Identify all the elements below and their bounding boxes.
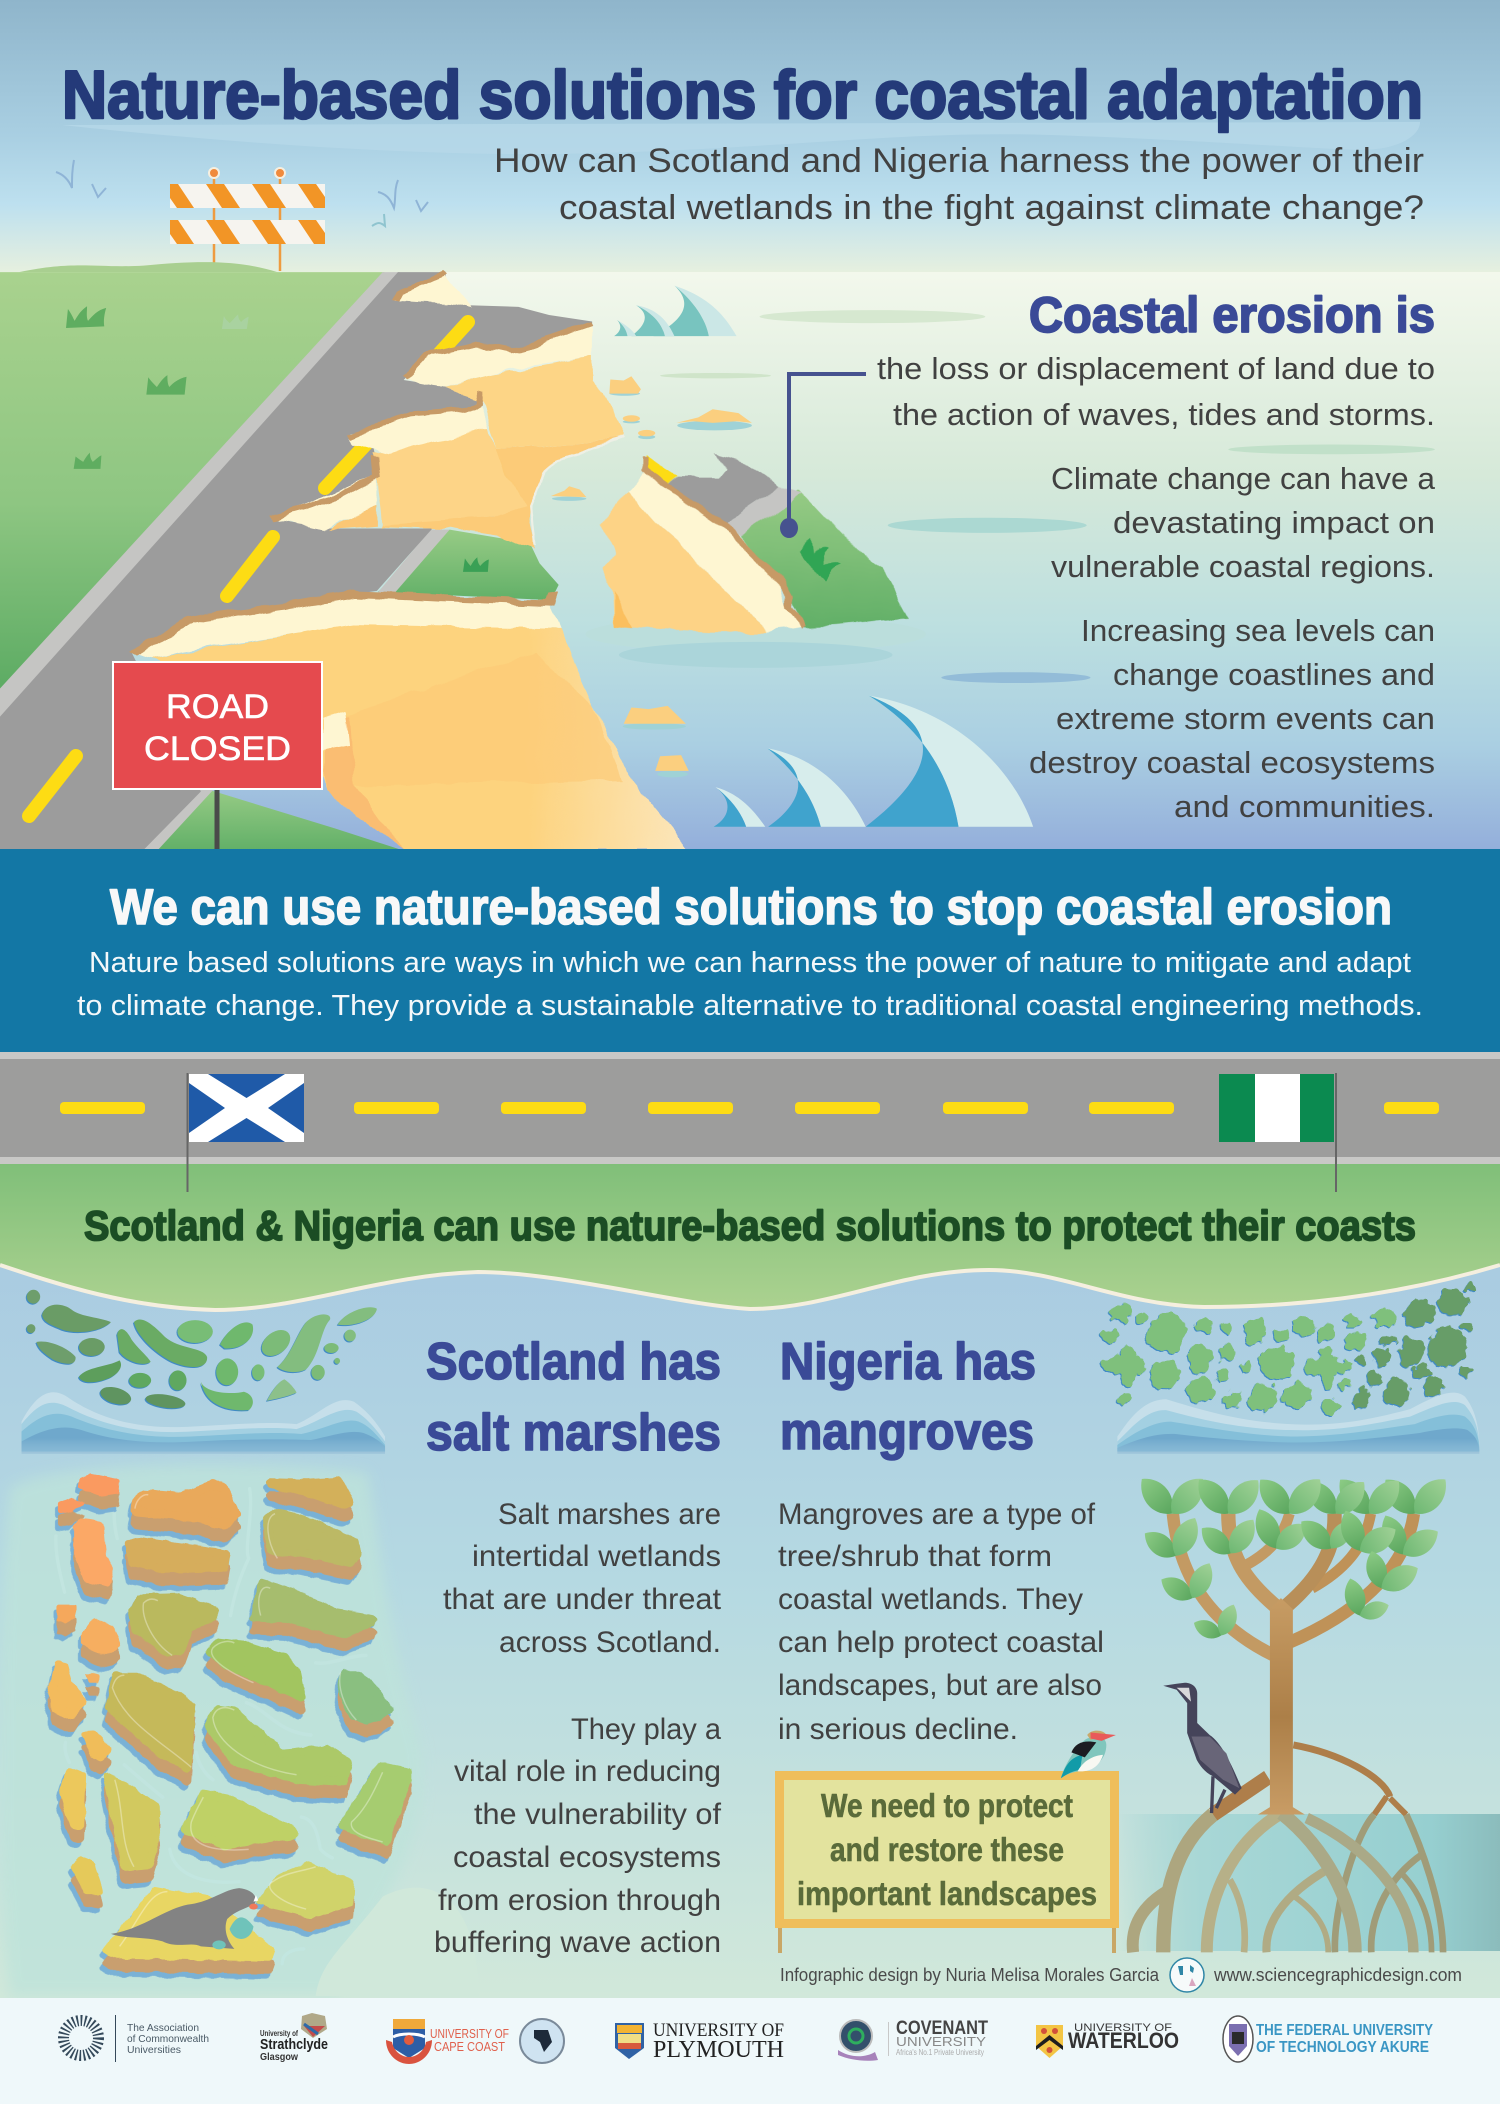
cliff: left strata [271, 474, 377, 529]
logo: University of Waterloo [1036, 2022, 1179, 2058]
heading: Scotland has salt marshes: salt marshes [426, 1404, 721, 1462]
cliff: upper strata [404, 325, 592, 386]
green bank [0, 1164, 1500, 1310]
text: salt marshes: Salt marshes are [498, 1498, 721, 1531]
logo: Covenant University: COVENANT [896, 2018, 988, 2039]
panel: road divider [0, 1052, 1500, 1164]
logo: University of Waterloo: UNIVERSITY OF [1074, 2022, 1172, 2034]
salt marsh illustration [0, 1290, 478, 1996]
icon: island grass [798, 540, 841, 582]
land: grass verge [0, 272, 385, 691]
logo: University of Cape Coast: UNIVERSITY OF [430, 2027, 509, 2041]
callout sign: We need to protect [821, 1787, 1073, 1824]
arrow: leader line [780, 374, 866, 538]
text: climate impact: Climate change can have a [1051, 461, 1436, 496]
icon: small waves [614, 286, 737, 336]
logo: University of Cape Coast [386, 2019, 564, 2064]
road closed sign [113, 662, 322, 850]
heading: Nigeria has mangroves [780, 1333, 1036, 1461]
logo: University of Strathclyde: Glasgow [260, 2052, 298, 2063]
text: mangroves: Mangroves are a type of [778, 1498, 1096, 1531]
cliff: lower section [153, 623, 689, 850]
icon: kingfisher [1061, 1731, 1116, 1778]
panel: nature-based solutions banner [0, 849, 1500, 1052]
cliffs [132, 273, 910, 850]
text: salt marshes: across Scotland. [499, 1626, 721, 1659]
waves band [22, 1392, 385, 1454]
flag: Nigeria [1219, 1073, 1337, 1192]
mini map: mangrove patches [1100, 1284, 1476, 1416]
callout sign [775, 1771, 1119, 1953]
text: climate impact: devastating impact on [1113, 505, 1435, 540]
text: salt marshes: They play a [571, 1713, 721, 1746]
text: salt marshes [434, 1498, 722, 1959]
logo: University of Strathclyde: University of [260, 2029, 298, 2038]
cliff: middle strata [348, 403, 488, 453]
icon: sand fragments [551, 376, 752, 777]
logo: Covenant University: UNIVERSITY [896, 2034, 986, 2049]
logo: Covenant University: Africa's No.1 Private University [896, 2048, 984, 2057]
banner text: to climate change. They provide a sustainable alternative to traditional coastal engineering methods. [77, 990, 1423, 1022]
text: sea levels: destroy coastal ecosystems [1029, 745, 1435, 780]
cliff: top fragment [395, 273, 472, 308]
logo: Association of Commonwealth Universities: The Association [127, 2022, 199, 2034]
text: sea levels: and communities. [1174, 789, 1435, 824]
icon: designer logo [1170, 1958, 1204, 1992]
subtitle: coastal wetlands in the fight against climate change? [559, 189, 1424, 227]
logo: University of Plymouth: UNIVERSITY OF [653, 2020, 784, 2041]
trunk [1258, 1598, 1305, 1815]
text: mangroves: tree/shrub that form [778, 1540, 1052, 1573]
text: mangroves: can help protect coastal [778, 1626, 1104, 1659]
panel: lower wetlands [0, 1073, 1500, 1998]
logo: Federal University of Technology Akure [1223, 2016, 1434, 2062]
subtitle [494, 142, 1424, 227]
island: broken road fragment [601, 453, 910, 632]
road closed sign: CLOSED [144, 730, 291, 768]
cliff: sand body [381, 438, 624, 550]
text: mangroves: coastal wetlands. They [778, 1583, 1083, 1616]
panel: footer logos [0, 1998, 1500, 2104]
subtitle: How can Scotland and Nigeria harness the power of their [494, 142, 1424, 180]
road dashes [29, 322, 468, 816]
text: salt marshes: intertidal wetlands [472, 1540, 721, 1573]
title: Nature-based solutions for coastal adaptation [62, 57, 1423, 133]
icon: birds [56, 160, 428, 226]
logo: Association of Commonwealth Universities: of Commonwealth [127, 2033, 209, 2045]
text: salt marshes: coastal ecosystems [453, 1841, 721, 1874]
tree branches [1173, 1514, 1414, 1655]
water ripples [56, 1489, 366, 1964]
text: definition: the loss or displacement of land due to [877, 351, 1435, 386]
island highlights [112, 1495, 383, 1946]
panel: coastal erosion scene [0, 262, 1500, 850]
text: sea levels: Increasing sea levels can [1081, 613, 1435, 648]
logo: University of Cape Coast: CAPE COAST [434, 2040, 505, 2054]
logo: Federal University of Technology Akure: THE FEDERAL UNIVERSITY [1256, 2022, 1434, 2039]
logo: University of Plymouth: PLYMOUTH [653, 2037, 784, 2063]
credit line: Infographic design by Nuria Melisa Morales Garcia [780, 1965, 1160, 1985]
flag: Scotland [186, 1073, 304, 1192]
banner text: Nature based solutions are ways in which we can harness the power of nature to mitigate and adapt [89, 947, 1411, 979]
icon: grass tufts [66, 306, 489, 572]
logo: Federal University of Technology Akure: OF TECHNOLOGY AKURE [1256, 2039, 1429, 2056]
heading: coastal erosion is: Coastal erosion is [1029, 287, 1435, 343]
text: salt marshes: from erosion through [438, 1884, 721, 1917]
banner heading: We can use nature-based solutions to stop coastal erosion [110, 879, 1392, 935]
logo: University of Waterloo: WATERLOO [1068, 2028, 1179, 2053]
panel: sky header [0, 0, 1500, 272]
text: mangroves: in serious decline. [778, 1713, 1018, 1746]
callout sign: and restore these [830, 1831, 1064, 1868]
marsh islands [53, 1476, 407, 1957]
icon: heron [1163, 1683, 1242, 1813]
logo: Covenant University [838, 2018, 988, 2061]
text: definition: the action of waves, tides and storms. [893, 397, 1435, 432]
text: salt marshes: that are under threat [443, 1583, 722, 1616]
logo: University of Strathclyde [260, 2013, 328, 2063]
icon: large waves [714, 696, 1033, 827]
text: mangroves [778, 1498, 1104, 1746]
logo: University of Plymouth [615, 2020, 784, 2063]
text: sea levels: change coastlines and [1113, 657, 1435, 692]
mangrove illustration [1061, 1284, 1479, 1952]
heading: Nigeria has mangroves: mangroves [780, 1403, 1034, 1461]
logo: Association of Commonwealth Universities: Universities [127, 2044, 181, 2056]
mini map: salt marsh patches [27, 1290, 377, 1411]
text: salt marshes: vital role in reducing [454, 1755, 721, 1788]
text: sea levels: extreme storm events can [1056, 701, 1435, 736]
road closed sign: ROAD [166, 688, 269, 726]
text: climate impact: vulnerable coastal regions. [1051, 549, 1435, 584]
roots [1133, 1745, 1443, 1952]
credit line [780, 1958, 1462, 1992]
text: definition [877, 351, 1435, 432]
text: salt marshes: the vulnerability of [474, 1798, 722, 1831]
text: mangroves: landscapes, but are also [778, 1669, 1102, 1702]
heading: Nigeria has mangroves: Nigeria has [780, 1333, 1036, 1391]
icon: road barricade [170, 168, 325, 271]
logo: Association of Commonwealth Universities [64, 2015, 209, 2062]
water under mangrove [1118, 1814, 1500, 1951]
callout sign: important landscapes [797, 1875, 1097, 1912]
heading: Scotland has salt marshes: Scotland has [426, 1333, 721, 1391]
heading: Scotland has salt marshes [426, 1333, 721, 1462]
waves band [1117, 1393, 1479, 1454]
leaves [1133, 1470, 1454, 1643]
logo: University of Strathclyde: Strathclyde [260, 2036, 328, 2053]
text: sea levels [1029, 613, 1435, 824]
text: salt marshes: buffering wave action [434, 1926, 721, 1959]
road [0, 272, 400, 718]
credit line: www.sciencegraphicdesign.com [1213, 1965, 1462, 1985]
icon: seal [111, 1888, 258, 1949]
banner text [77, 947, 1423, 1022]
road centre dashes [60, 1102, 1439, 1114]
text: climate impact [1051, 461, 1436, 584]
